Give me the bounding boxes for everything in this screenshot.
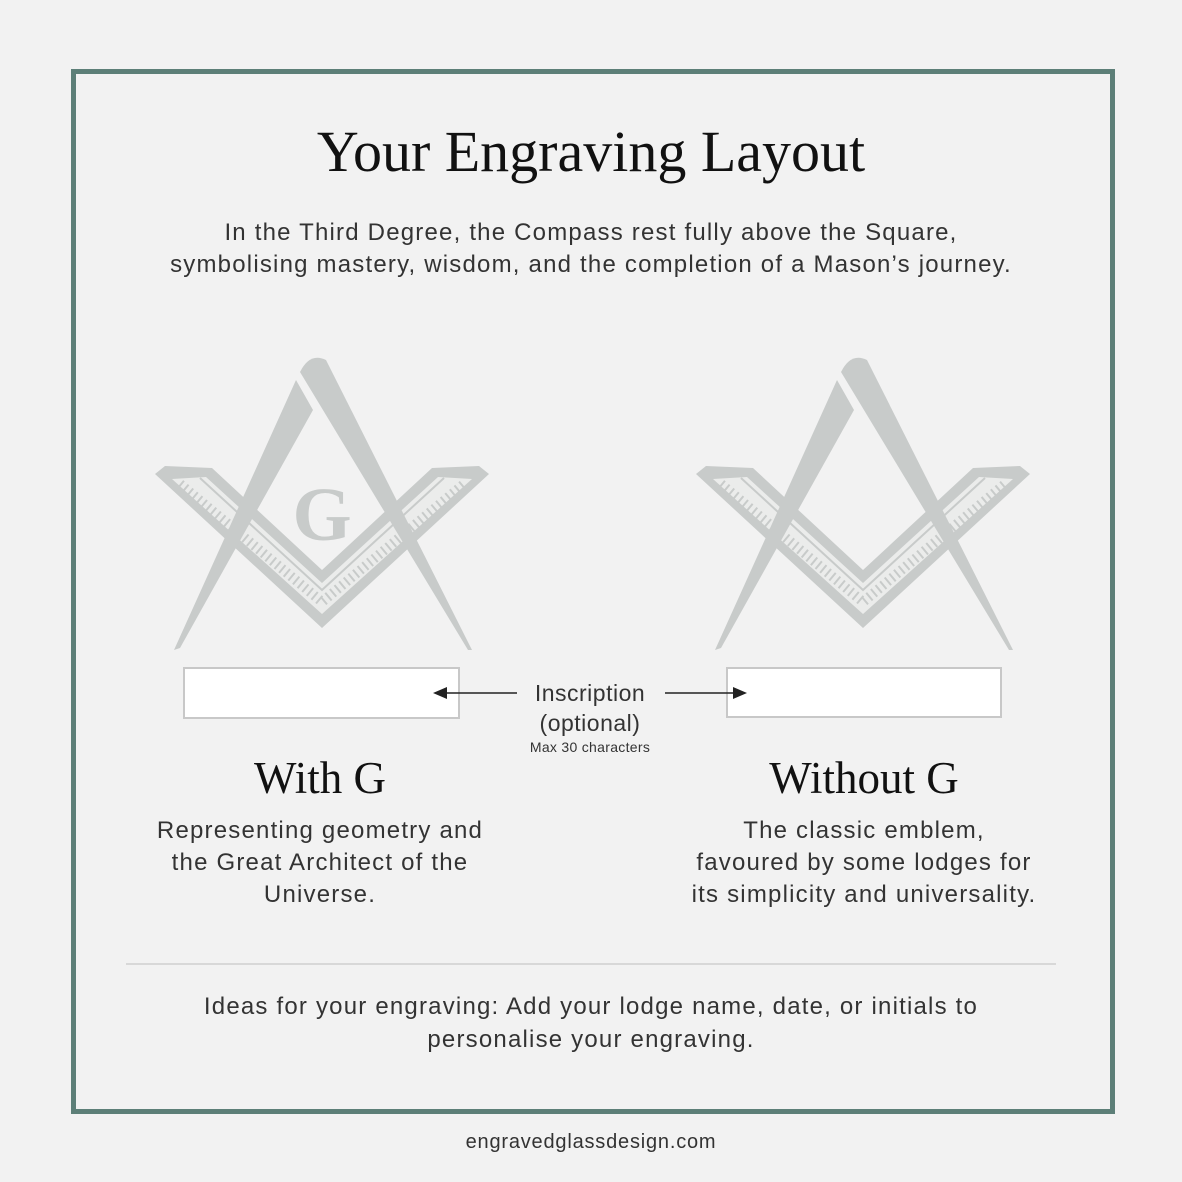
title: Your Engraving Layout: [317, 119, 865, 184]
inscription box right: [726, 667, 1002, 718]
text: without G: its simplicity and universality.: [692, 881, 1036, 908]
ideas text: Ideas for your engraving: Add your lodge name, date, or initials to: [204, 993, 978, 1020]
arrow right: [665, 687, 747, 699]
subtitle text: In the Third Degree, the Compass rest fully above the Square,: [224, 219, 958, 246]
ideas text: [204, 993, 978, 1053]
arrow left: [433, 687, 517, 699]
text: with G: [157, 817, 483, 908]
emblem: without G: [696, 358, 1030, 650]
footer url: engravedglassdesign.com: [466, 1131, 716, 1153]
inscription label: (optional): [540, 710, 640, 736]
emblem: with G: G: [292, 473, 352, 557]
inscription label: Inscription: [535, 680, 645, 706]
text: without G: favoured by some lodges for: [696, 849, 1032, 876]
subtitle text: symbolising mastery, wisdom, and the completion of a Mason’s journey.: [170, 251, 1012, 278]
text: with G: Representing geometry and: [157, 817, 483, 844]
ideas text: personalise your engraving.: [427, 1026, 755, 1053]
heading: with G: With G: [254, 753, 386, 803]
text: with G: the Great Architect of the: [172, 849, 468, 876]
subtitle text: [170, 219, 1012, 278]
inscription label: Max 30 characters: [530, 739, 650, 755]
text: without G: The classic emblem,: [743, 817, 985, 844]
text: without G: [692, 817, 1036, 908]
emblem: with G: [155, 358, 489, 650]
frame border: [71, 69, 1115, 1114]
heading: without G: Without G: [769, 753, 959, 803]
inscription box left: [183, 667, 460, 719]
text: with G: Universe.: [264, 881, 376, 908]
inscription label: [530, 680, 650, 755]
